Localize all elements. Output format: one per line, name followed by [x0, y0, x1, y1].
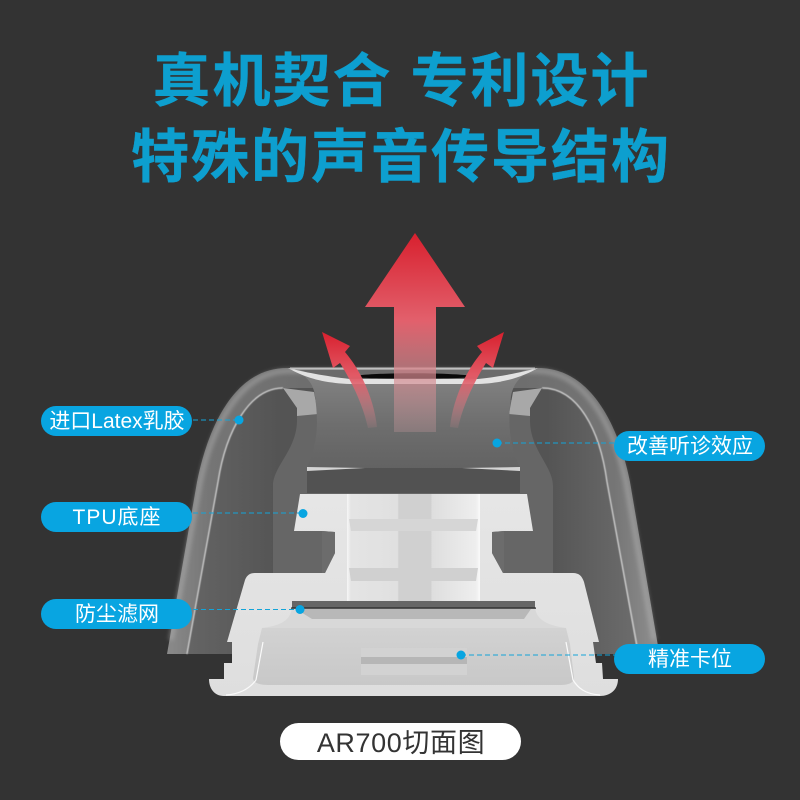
pill label: TPU底座: [72, 506, 162, 529]
inner chamber: [253, 628, 574, 685]
dark band: [307, 468, 520, 493]
neck lip highlight: [288, 368, 538, 384]
tube upper ring: [349, 519, 478, 531]
leader line: [497, 442, 615, 444]
silicone inner cavity: [187, 388, 637, 654]
flange bright edges: [226, 642, 600, 695]
leader line: [193, 419, 239, 421]
caption text: AR700切面图: [317, 728, 485, 758]
inner core sleeve: [273, 400, 553, 574]
marker dot: [492, 438, 502, 448]
under-filter shade: [296, 609, 531, 619]
pill: [41, 599, 192, 629]
left curved arrow: [322, 332, 377, 428]
neck top rim: [290, 368, 535, 370]
chamber roof: [262, 608, 566, 628]
pill: [41, 502, 192, 532]
callout: TPU base: [41, 502, 308, 532]
title line 1: 真机契合 专利设计: [152, 49, 651, 114]
central tube: [347, 494, 480, 601]
pill label: 防尘滤网: [75, 603, 159, 626]
soft shell edge highlight: [171, 371, 654, 640]
neck top interior: [300, 370, 526, 379]
tube body: [347, 494, 480, 601]
silicone outer shell: [167, 368, 658, 654]
side shadow recesses: [322, 531, 504, 573]
large red arrow: [365, 233, 465, 432]
filter dark line: [291, 608, 536, 609]
neck opening dark: [350, 373, 478, 378]
callout: dust filter: [41, 599, 304, 629]
marker dot: [298, 509, 308, 518]
pill label: 精准卡位: [648, 648, 732, 671]
pill label: 改善听诊效应: [627, 435, 753, 458]
caption pill: [280, 723, 521, 760]
neck tube: [287, 368, 538, 468]
pill label: 进口Latex乳胶: [49, 410, 185, 433]
pill: [614, 644, 765, 674]
inner cavity highlight line: [187, 388, 637, 654]
ear tip cross-section: [167, 368, 658, 696]
pill: [41, 406, 192, 436]
right curved arrow: [450, 332, 504, 428]
pill: [614, 431, 765, 461]
leader line: [193, 608, 300, 610]
tube lower ring: [349, 568, 478, 581]
callout: imported latex: [41, 406, 244, 436]
marker dot: [456, 650, 466, 660]
bottom slot: [361, 648, 467, 675]
slot dark band: [361, 657, 467, 664]
callout: precise clip: [456, 644, 765, 674]
band highlight: [307, 467, 520, 471]
dust filter mesh: [292, 601, 535, 608]
marker dot: [296, 605, 304, 614]
title: [131, 49, 671, 190]
marker dot: [234, 416, 244, 424]
leader line: [193, 512, 303, 514]
section caption: [280, 723, 521, 760]
title line 2: 特殊的声音传导结构: [131, 125, 671, 190]
callout: improved listening: [492, 431, 765, 461]
TPU base and retaining body: [209, 494, 618, 696]
flare shoulders: [283, 388, 542, 416]
leader line: [461, 654, 615, 656]
